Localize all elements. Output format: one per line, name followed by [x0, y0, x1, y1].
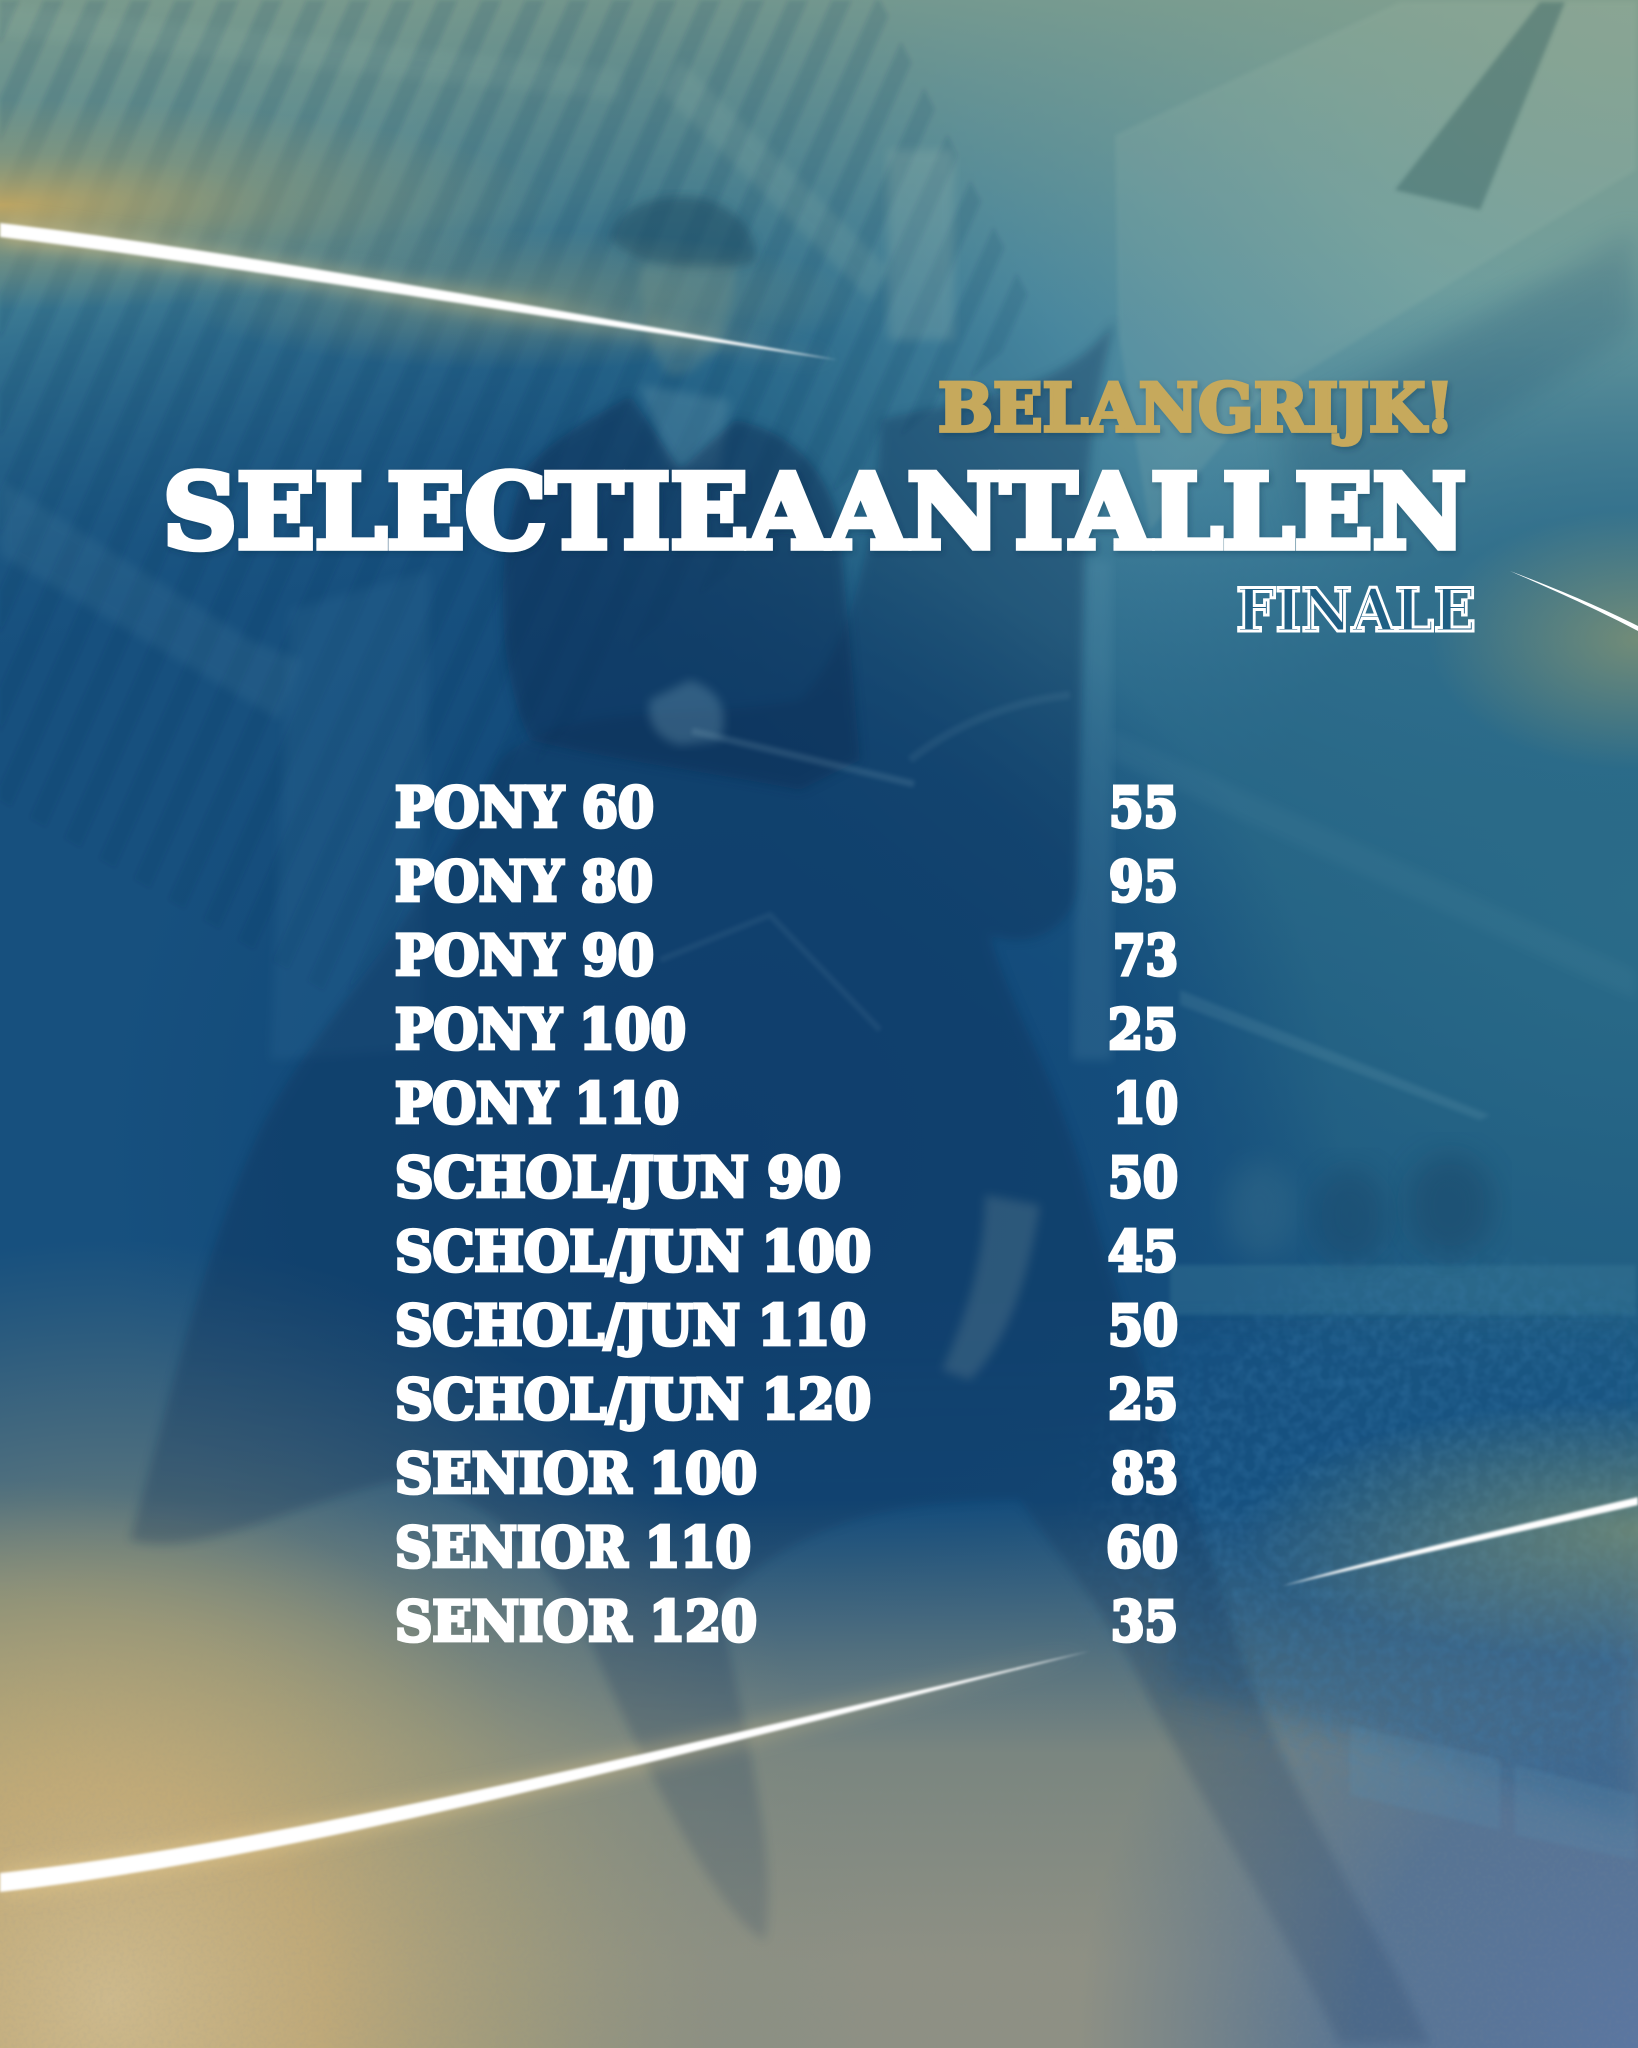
light streak: right: [1510, 571, 1638, 631]
background: arena roof: [0, 0, 1040, 1060]
row: Schol/Jun 90: SCHOL/JUN 90: [395, 1144, 841, 1210]
row: Schol/Jun 120: SCHOL/JUN 120: [395, 1366, 871, 1432]
title: SELECTIEAANTALLEN: SELECTIEAANTALLEN: [163, 452, 1466, 572]
row: Senior 120: [395, 1588, 1178, 1654]
row: Pony 80: [395, 848, 1178, 914]
row: Schol/Jun 120: [395, 1366, 1178, 1432]
light streak: top left: [0, 222, 838, 360]
row: Schol/Jun 110: SCHOL/JUN 110: [395, 1292, 866, 1358]
row: Schol/Jun 110: 50: [1108, 1292, 1178, 1358]
silhouette: horse detail, tail wrap: [942, 1195, 1040, 1380]
row: Pony 100: [395, 996, 1178, 1062]
row: Schol/Jun 90: [395, 1144, 1178, 1210]
row: Pony 90: [395, 922, 1178, 988]
row: Schol/Jun 110: [395, 1292, 1178, 1358]
subtitle: FINALE: FINALE: [1236, 576, 1476, 646]
silhouette: horse and rider: [130, 197, 1430, 2044]
row: Schol/Jun 100: [395, 1218, 1178, 1284]
silhouette: rider: [503, 197, 914, 790]
row: Senior 120: 35: [1111, 1588, 1178, 1654]
light streak: bottom right: [1282, 1497, 1638, 1586]
background: crowd and barrier: [1156, 1158, 1638, 1817]
row: Pony 90: 73: [1113, 922, 1178, 988]
row: Pony 110: 10: [1113, 1070, 1178, 1136]
row: Pony 110: [395, 1070, 1178, 1136]
row: Pony 60: [395, 774, 1178, 840]
row: Pony 110: PONY 110: [395, 1070, 679, 1136]
row: Senior 100: SENIOR 100: [395, 1440, 757, 1506]
kicker: BELANGRIJK!: BELANGRIJK!: [938, 369, 1454, 447]
background: sponsor banners: [1072, 2, 1636, 1120]
row: Schol/Jun 90: 50: [1108, 1144, 1178, 1210]
light streak: bottom left: [0, 1651, 1090, 1896]
row: Schol/Jun 120: 25: [1108, 1366, 1178, 1432]
row: Pony 100: PONY 100: [395, 996, 686, 1062]
row: Pony 80: PONY 80: [395, 848, 653, 914]
row: Pony 90: PONY 90: [395, 922, 654, 988]
row: Senior 110: 60: [1106, 1514, 1178, 1580]
row: Senior 120: SENIOR 120: [395, 1588, 757, 1654]
row: Senior 100: 83: [1111, 1440, 1178, 1506]
row: Senior 110: SENIOR 110: [395, 1514, 751, 1580]
silhouette: horse: [130, 320, 1430, 2044]
silhouette: tack lines: [660, 695, 1070, 1030]
row: Schol/Jun 100: 45: [1108, 1218, 1178, 1284]
row: Pony 100: 25: [1108, 996, 1178, 1062]
row: Schol/Jun 100: SCHOL/JUN 100: [395, 1218, 871, 1284]
table: selection counts: [395, 774, 1178, 1654]
row: Pony 60: PONY 60: [395, 774, 654, 840]
row: Senior 100: [395, 1440, 1178, 1506]
row: Pony 80: 95: [1109, 848, 1178, 914]
row: Senior 110: [395, 1514, 1178, 1580]
row: Pony 60: 55: [1109, 774, 1178, 840]
